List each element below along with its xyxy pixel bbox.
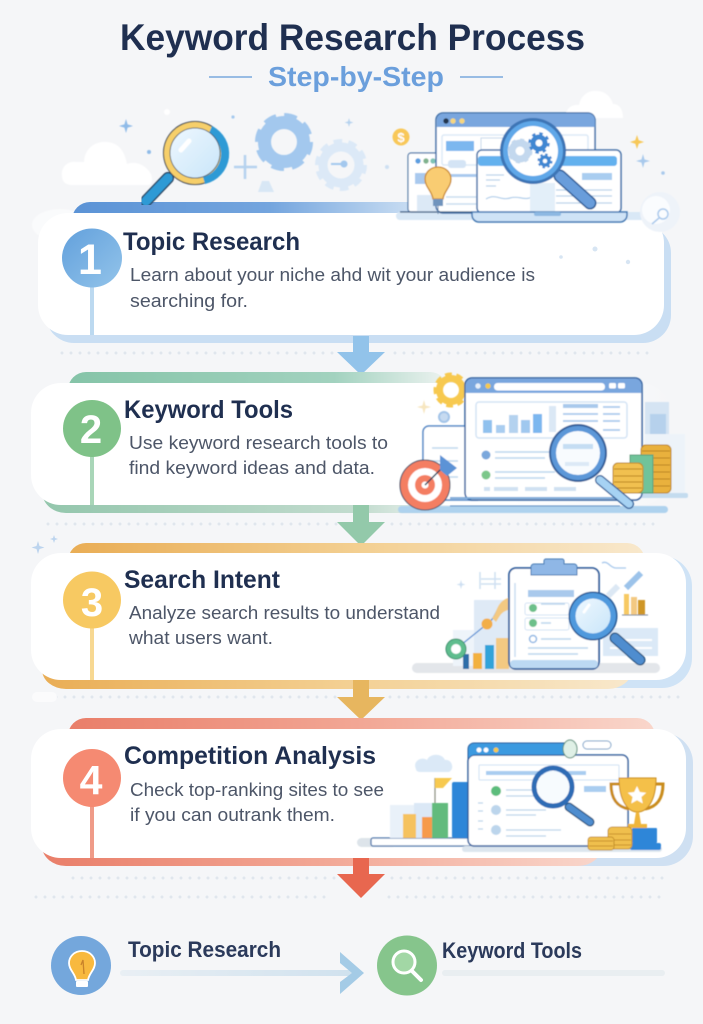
arrow 3 <box>337 680 385 720</box>
magnifier <box>534 768 590 822</box>
top bar <box>72 202 432 242</box>
cloud right <box>566 91 623 118</box>
label: Topic Research <box>128 937 281 962</box>
number badge: 2 <box>80 408 102 452</box>
left document <box>423 426 483 500</box>
header illustration: browsers and laptop <box>392 91 680 232</box>
step 4 panel <box>31 718 693 866</box>
description: Use keyword research tools to <box>129 432 388 453</box>
left coin stack <box>613 463 643 493</box>
icon: lightbulb circle <box>51 936 111 995</box>
background chart <box>446 598 514 669</box>
chevron arrow <box>340 952 364 994</box>
number badge <box>63 749 121 858</box>
description <box>128 602 440 648</box>
decorative marks <box>480 572 501 589</box>
left bar remnant <box>32 692 57 702</box>
heading: Topic Research <box>123 228 300 256</box>
step 2 illustration <box>398 376 688 513</box>
fading line <box>442 970 665 976</box>
bottom flow: keyword tools <box>377 936 665 996</box>
right coin stack <box>641 445 671 493</box>
cloud <box>415 755 452 772</box>
number badge: 1 <box>78 236 102 284</box>
connector line <box>120 970 360 976</box>
coins <box>588 827 632 850</box>
under shadow <box>46 225 671 343</box>
card <box>31 383 671 505</box>
card <box>31 553 686 680</box>
description <box>130 779 384 825</box>
step 4 illustration <box>357 740 663 852</box>
header illustration: magnifier <box>146 121 229 201</box>
bottom flow: topic research <box>51 936 364 995</box>
subtitle: Step-by-Step <box>268 61 444 92</box>
dotted divider 1 <box>62 352 648 354</box>
description <box>130 264 535 311</box>
heading: Search Intent <box>124 566 281 594</box>
label: Keyword Tools <box>442 938 582 963</box>
target with dart <box>400 455 457 510</box>
lightbulb <box>425 167 451 214</box>
shelf <box>357 838 662 852</box>
step 2 panel <box>31 372 671 513</box>
base <box>398 506 668 513</box>
bottom bar <box>42 650 632 689</box>
description: find keyword ideas and data. <box>129 457 375 478</box>
clipboard <box>509 559 599 669</box>
number badge <box>63 400 121 505</box>
description: Check top-ranking sites to see <box>130 779 384 800</box>
dotted divider 5 <box>36 896 668 898</box>
small browser <box>408 153 458 212</box>
magnifier with gears <box>500 118 590 203</box>
title: Keyword Research Process <box>120 17 585 58</box>
number badge <box>62 228 122 335</box>
right shadow <box>400 733 693 866</box>
base shadow <box>396 212 646 220</box>
bar chart with flag <box>390 778 469 838</box>
card <box>38 213 664 335</box>
green note <box>630 455 653 493</box>
arrow 4 <box>337 858 385 898</box>
number badge <box>63 572 121 680</box>
dollar coin: $ <box>397 130 405 145</box>
description: searching for. <box>130 290 248 311</box>
sparkles left <box>32 535 58 554</box>
right shadow <box>400 556 692 688</box>
number badge: 4 <box>80 757 103 803</box>
background panels <box>645 402 669 434</box>
description: what users want. <box>128 627 273 648</box>
number badge: 3 <box>81 581 103 625</box>
small bars and pencil <box>603 573 658 656</box>
card <box>31 729 686 858</box>
arrow 1 <box>337 336 385 375</box>
top bar <box>68 543 645 583</box>
ground shadow <box>412 663 660 673</box>
back browser <box>436 113 595 213</box>
header illustration: left cloud and gears <box>32 109 389 241</box>
icon: search circle <box>377 936 437 996</box>
top bar <box>68 372 448 412</box>
heading: Competition Analysis <box>124 742 376 770</box>
sparkles <box>630 135 644 149</box>
description: if you can outrank them. <box>130 804 335 825</box>
arrow 2 <box>337 505 385 546</box>
cloud behind card <box>32 209 88 241</box>
bell shape <box>258 181 274 192</box>
scroll tag <box>563 740 611 758</box>
dotted divider 4 <box>73 876 665 880</box>
plus <box>234 155 257 179</box>
description: Learn about your niche ahd wit your audience is <box>130 264 535 285</box>
magnifier <box>549 424 629 504</box>
bottom bar <box>42 470 442 513</box>
dotted divider 2 <box>48 522 655 526</box>
trophy <box>611 778 663 850</box>
top bar <box>68 718 655 758</box>
description <box>129 432 388 478</box>
dotted divider 3 <box>56 696 680 698</box>
step 3 illustration <box>412 559 660 673</box>
gear large <box>260 118 308 166</box>
sparkle <box>119 119 133 133</box>
browser window <box>450 378 642 506</box>
step 1 panel <box>38 202 671 343</box>
step 3 panel <box>31 543 692 689</box>
cloud <box>62 142 152 185</box>
small cloud magnifier <box>640 192 680 232</box>
browser window <box>468 743 628 846</box>
heading: Keyword Tools <box>124 396 293 424</box>
gear small <box>319 143 363 187</box>
sparkle <box>417 400 431 414</box>
bottom bar <box>42 826 602 866</box>
dollar coin <box>392 128 410 146</box>
magnifier <box>568 592 640 660</box>
description: Analyze search results to understand <box>129 602 440 623</box>
laptop <box>400 150 627 222</box>
gear <box>437 376 465 404</box>
